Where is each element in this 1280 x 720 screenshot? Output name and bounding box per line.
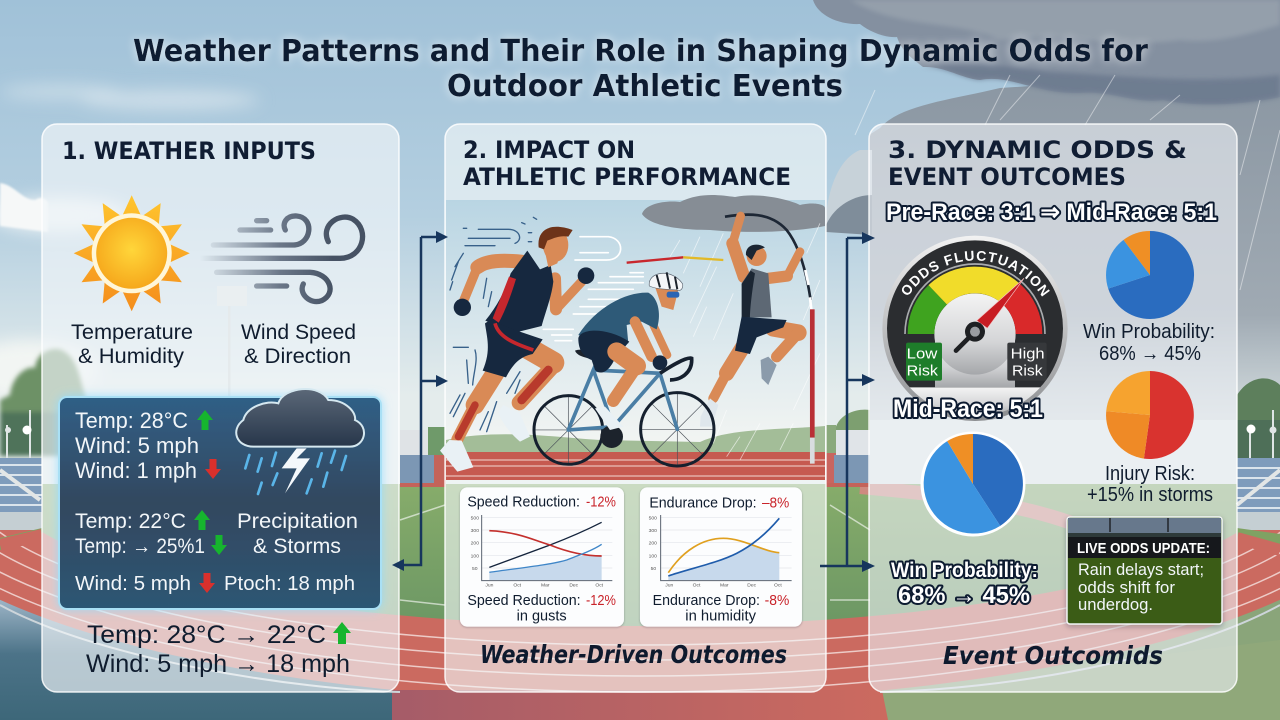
title: Weather Patterns and Their Role in Shaping Dynamic Odds for xyxy=(133,34,1148,69)
chart card: speed reduction xyxy=(460,487,624,627)
chart card: endurance drop: Endurance Drop: xyxy=(649,494,757,511)
callout: live odds update: underdog. xyxy=(1078,595,1153,614)
chart card: speed reduction: Speed Reduction: xyxy=(467,592,581,609)
panel: live weather readout: Temp: 28°C xyxy=(75,408,188,433)
storm clouds xyxy=(813,0,1280,420)
panel: live weather readout xyxy=(59,389,381,609)
vaulter xyxy=(627,215,815,464)
label: temperature and humidity: & Humidity xyxy=(78,345,185,368)
chart card: endurance drop: Oct xyxy=(693,583,701,589)
pie chart: win probability xyxy=(1106,231,1194,319)
stands xyxy=(0,458,1280,550)
icon: sun xyxy=(74,195,190,311)
panel: live weather readout: Temp: → 25%1 xyxy=(75,535,205,558)
chart card: speed reduction: Dec xyxy=(569,583,579,589)
summary: temperature and wind change xyxy=(86,621,351,678)
chart card: speed reduction: Oct xyxy=(595,583,604,589)
label: wind speed and direction: Wind Speed xyxy=(241,321,356,344)
label: injury risk: Injury Risk: xyxy=(1105,463,1195,485)
chart card: endurance drop: 500 xyxy=(649,515,657,521)
panel: live weather readout: Ptoch: 18 mph xyxy=(224,573,355,595)
motion lines xyxy=(450,217,537,432)
title xyxy=(133,34,1148,104)
icon: storm cloud with rain and lightning xyxy=(236,389,364,494)
heading: impact on athletic performance: ATHLETIC PERFORMANCE xyxy=(463,163,791,191)
chart card: endurance drop: 300 xyxy=(649,528,657,534)
panel: live weather readout: Wind: 5 mph xyxy=(75,433,199,458)
label: win probability: 68% → 45% xyxy=(1099,343,1201,365)
chart card: endurance drop: 100 xyxy=(649,553,657,559)
label: temperature and humidity: Temperature xyxy=(71,321,193,344)
callout: live odds update: Rain delays start; xyxy=(1078,560,1204,579)
storm cloud in illustration xyxy=(642,195,825,232)
high risk label: Risk xyxy=(1012,362,1043,379)
chart card: speed reduction: 200 xyxy=(471,541,479,547)
chart card: endurance drop xyxy=(640,487,802,627)
callout: live odds update: LIVE ODDS UPDATE: xyxy=(1077,540,1210,557)
chart card: speed reduction: Mar xyxy=(541,583,550,589)
panel: impact on athletic performance xyxy=(440,124,826,692)
gauge reading: Mid-Race: 5:1 xyxy=(893,395,1043,423)
chart card: speed reduction: -12% xyxy=(586,592,616,609)
chart card: speed reduction: 500 xyxy=(471,515,479,521)
label: win probability xyxy=(1083,321,1215,365)
heading: impact on athletic performance: 2. IMPACT ON xyxy=(463,136,635,164)
callout: live odds update xyxy=(1067,517,1222,624)
heading: dynamic odds and event outcomes xyxy=(888,136,1187,191)
gauge: odds fluctuation: ODDS FLUCTUATION xyxy=(902,250,1050,296)
icon: wind xyxy=(200,216,363,302)
runner xyxy=(440,227,594,472)
back leg xyxy=(440,373,495,472)
panel: live weather readout: Temp: 22°C xyxy=(75,510,186,533)
arrows: weather inputs to impact xyxy=(392,231,448,571)
chart card: speed reduction: 50 xyxy=(472,566,478,572)
low risk label: Low xyxy=(907,346,938,363)
chart card: speed reduction: 300 xyxy=(471,528,479,534)
label: wind speed and direction xyxy=(241,321,356,368)
caption: weather-driven outcomes: Weather-Driven Outcomes xyxy=(480,640,787,669)
gauge: odds fluctuation xyxy=(882,236,1068,421)
chart card: speed reduction: Jun xyxy=(485,583,494,589)
low risk label: Risk xyxy=(907,362,939,379)
track base xyxy=(0,484,1280,720)
chart card: endurance drop: Mar xyxy=(720,583,729,589)
label: temperature and humidity xyxy=(71,321,193,368)
chart card: endurance drop: in humidity xyxy=(685,608,756,625)
panel: live weather readout: Wind: 1 mph xyxy=(75,458,197,483)
chart card: endurance drop: Jun xyxy=(665,583,674,589)
chart card: endurance drop: Endurance Drop: xyxy=(653,592,760,609)
chart card: endurance drop: Dec xyxy=(747,583,757,589)
trees and buildings xyxy=(400,378,1280,487)
label: wind speed and direction: & Direction xyxy=(244,345,351,368)
odds change line: Pre-Race: 3:1 ⇒ Mid-Race: 5:1 xyxy=(886,199,1217,226)
heading: dynamic odds and event outcomes: EVENT OUTCOMES xyxy=(888,163,1126,191)
cyclist and bike xyxy=(533,272,714,466)
label: win probability shift xyxy=(891,559,1038,609)
chart card: endurance drop: -8% xyxy=(765,592,789,609)
floodlights xyxy=(5,286,1276,458)
illustration: runner, cyclist and pole vaulter in rain xyxy=(440,195,825,480)
label: injury risk: +15% in storms xyxy=(1087,484,1213,506)
callout: live odds update: odds shift for xyxy=(1078,578,1175,597)
front leg xyxy=(498,348,555,442)
chart card: endurance drop: Oct xyxy=(774,583,782,589)
label: win probability shift: 68% → 45% xyxy=(898,582,1030,609)
arrows: impact to dynamic odds xyxy=(820,232,875,572)
high risk label: High xyxy=(1011,346,1045,363)
chart card: endurance drop: 200 xyxy=(649,541,657,547)
chart card: endurance drop: 50 xyxy=(651,566,656,572)
panel: live weather readout: & Storms xyxy=(253,535,341,558)
heading: impact on athletic performance xyxy=(463,136,791,191)
chart card: speed reduction: 100 xyxy=(471,553,479,559)
chart card: speed reduction: Speed Reduction: xyxy=(467,494,580,511)
label: win probability shift: Win Probability: xyxy=(891,559,1038,582)
label: injury risk xyxy=(1087,463,1213,506)
chart card: speed reduction: in gusts xyxy=(517,608,567,625)
chart card: speed reduction: Oct xyxy=(513,583,522,589)
high risk label xyxy=(1007,343,1047,381)
panel: live weather readout: Wind: 5 mph xyxy=(75,573,191,595)
label: win probability: Win Probability: xyxy=(1083,321,1215,343)
chart card: endurance drop: –8% xyxy=(762,494,789,511)
caption: event outcomids: Event Outcomids xyxy=(943,641,1163,670)
panel: live weather readout: Precipitation xyxy=(237,510,358,533)
chart card: speed reduction: -12% xyxy=(586,494,616,511)
pie chart: injury risk xyxy=(1106,371,1194,459)
summary: temperature and wind change: Wind: 5 mph → 18 mph xyxy=(86,650,350,678)
summary: temperature and wind change: Temp: 28°C → 22°C xyxy=(87,621,326,649)
heading: weather inputs: 1. WEATHER INPUTS xyxy=(62,137,316,165)
panel: dynamic odds and event outcomes xyxy=(868,123,1238,693)
title: Outdoor Athletic Events xyxy=(447,69,843,104)
heading: dynamic odds and event outcomes: 3. DYNAMIC ODDS & xyxy=(888,136,1187,164)
panel: weather inputs xyxy=(42,124,399,692)
pie chart: win probability mid-race xyxy=(920,432,1026,536)
gauge needle xyxy=(956,278,1024,351)
low risk label xyxy=(906,343,942,381)
